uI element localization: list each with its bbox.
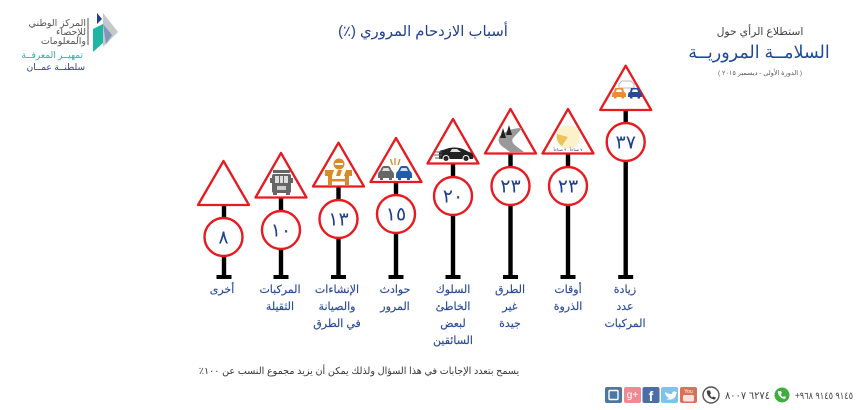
sign: traffic accidents: [370, 138, 422, 313]
icon: road works barrier: [325, 158, 352, 185]
sign: increasing number of vehicles: ٣٧: [615, 132, 636, 154]
sign: bad behaviour of some drivers: الخاطئ: [436, 301, 470, 313]
triangle: [198, 161, 249, 205]
sign: increasing number of vehicles: [600, 66, 651, 330]
survey heading: [688, 24, 830, 77]
phone number: ٨٠٠٧ ٦٢٧٤: [725, 390, 770, 402]
logo: national centre for statistics and information: [22, 13, 118, 72]
icon: speeding car: [433, 147, 473, 162]
logo text: للإحصاء: [56, 27, 86, 38]
sign: traffic accidents: المرور: [379, 301, 410, 313]
sign: traffic accidents: ١٥: [386, 204, 406, 226]
icon: google plus: g+: [627, 390, 638, 401]
social media and contact bar: [605, 387, 853, 404]
sign: bad behaviour of some drivers: السلوك: [436, 284, 470, 296]
sign: poor roads: ٢٣: [500, 176, 521, 198]
sign: construction and road maintenance: الإنشاءات: [315, 284, 359, 296]
icon: facebook: f: [649, 388, 654, 404]
sign: bad behaviour of some drivers: لبعض: [440, 318, 466, 330]
sign: increasing number of vehicles: عدد: [616, 301, 634, 313]
value circle: [204, 218, 242, 256]
sign: poor roads: جيدة: [499, 318, 521, 330]
sign: construction and road maintenance: [313, 143, 364, 330]
icon: colliding cars: [378, 158, 412, 180]
sign: bad behaviour of some drivers: ٢٠: [443, 186, 463, 208]
icon: phone: [703, 387, 719, 403]
icon: whatsapp: [774, 388, 790, 402]
icon: twitter: [661, 387, 678, 403]
logo text: تمهيــر المعرفــة: [22, 50, 83, 60]
icon: facebook: [642, 387, 660, 404]
footnote: يسمح بتعدد الإجابات في هذا السؤال ولذلك يمكن أن يزيد مجموع النسب عن ١٠٠٪: [199, 364, 519, 377]
sign: poor roads: الطرق: [495, 284, 525, 296]
sign: traffic accidents: حوادث: [380, 284, 410, 296]
sign: peak hours: الذروة: [554, 301, 582, 313]
sign: increasing number of vehicles: المركبات: [604, 318, 646, 330]
sign: heavy vehicles: ١٠: [271, 220, 291, 242]
icon: google plus: [624, 387, 641, 403]
sign: heavy vehicles: [256, 153, 306, 313]
sign: construction and road maintenance: ١٣: [328, 210, 349, 230]
label: أخرى: [210, 282, 234, 296]
title: أسباب الازدحام المروري (٪): [338, 21, 508, 40]
icon: clock with peak hours shaded: [553, 125, 583, 152]
sign: construction and road maintenance: في الطرق: [313, 318, 361, 330]
sign: peak hours: ٢٣: [558, 176, 578, 198]
sign: increasing number of vehicles: زيادة: [614, 284, 636, 296]
icon: queued cars: [612, 81, 642, 98]
icon: truck: [270, 170, 293, 195]
icon: instagram: [605, 387, 622, 403]
whatsapp number: +٩٦٨ ٩١٤٥ ٩١٤٥: [795, 391, 853, 402]
survey line one: استطلاع الرأي حول: [717, 24, 803, 38]
logo text: والمعلومات: [41, 36, 86, 47]
sign: bad behaviour of some drivers: [428, 119, 478, 347]
icon: youtube: [680, 387, 697, 403]
logo text: سلطنــة عمــان: [27, 62, 85, 72]
sign: peak hours: [542, 109, 594, 313]
icon: logo mark: [93, 13, 118, 52]
sign: other: [198, 161, 249, 296]
sign: heavy vehicles: الثقيلة: [266, 301, 294, 313]
survey round: ( الدورة الأولى - ديسمبر ٢٠١٥ ): [718, 68, 802, 77]
survey name: السلامــة المروريــة: [688, 42, 830, 63]
sign: construction and road maintenance: والصيانة: [319, 301, 355, 313]
sign: other: ٨: [218, 228, 229, 248]
logo text: [22, 18, 88, 72]
sign: bad behaviour of some drivers: السائقين: [433, 335, 473, 347]
logo text: المركز الوطني: [29, 18, 86, 29]
sign: poor roads: [485, 109, 536, 330]
icon: clock with peak hours shaded: ٧ صباحاً - ٩ صباحاً: [553, 146, 583, 152]
icon: youtube: You: [684, 389, 693, 395]
sign: heavy vehicles: المركبات: [259, 284, 301, 296]
sign: peak hours: أوقات: [554, 282, 582, 296]
sign: poor roads: غير: [501, 301, 518, 313]
icon: winding road with cones: [499, 125, 524, 152]
